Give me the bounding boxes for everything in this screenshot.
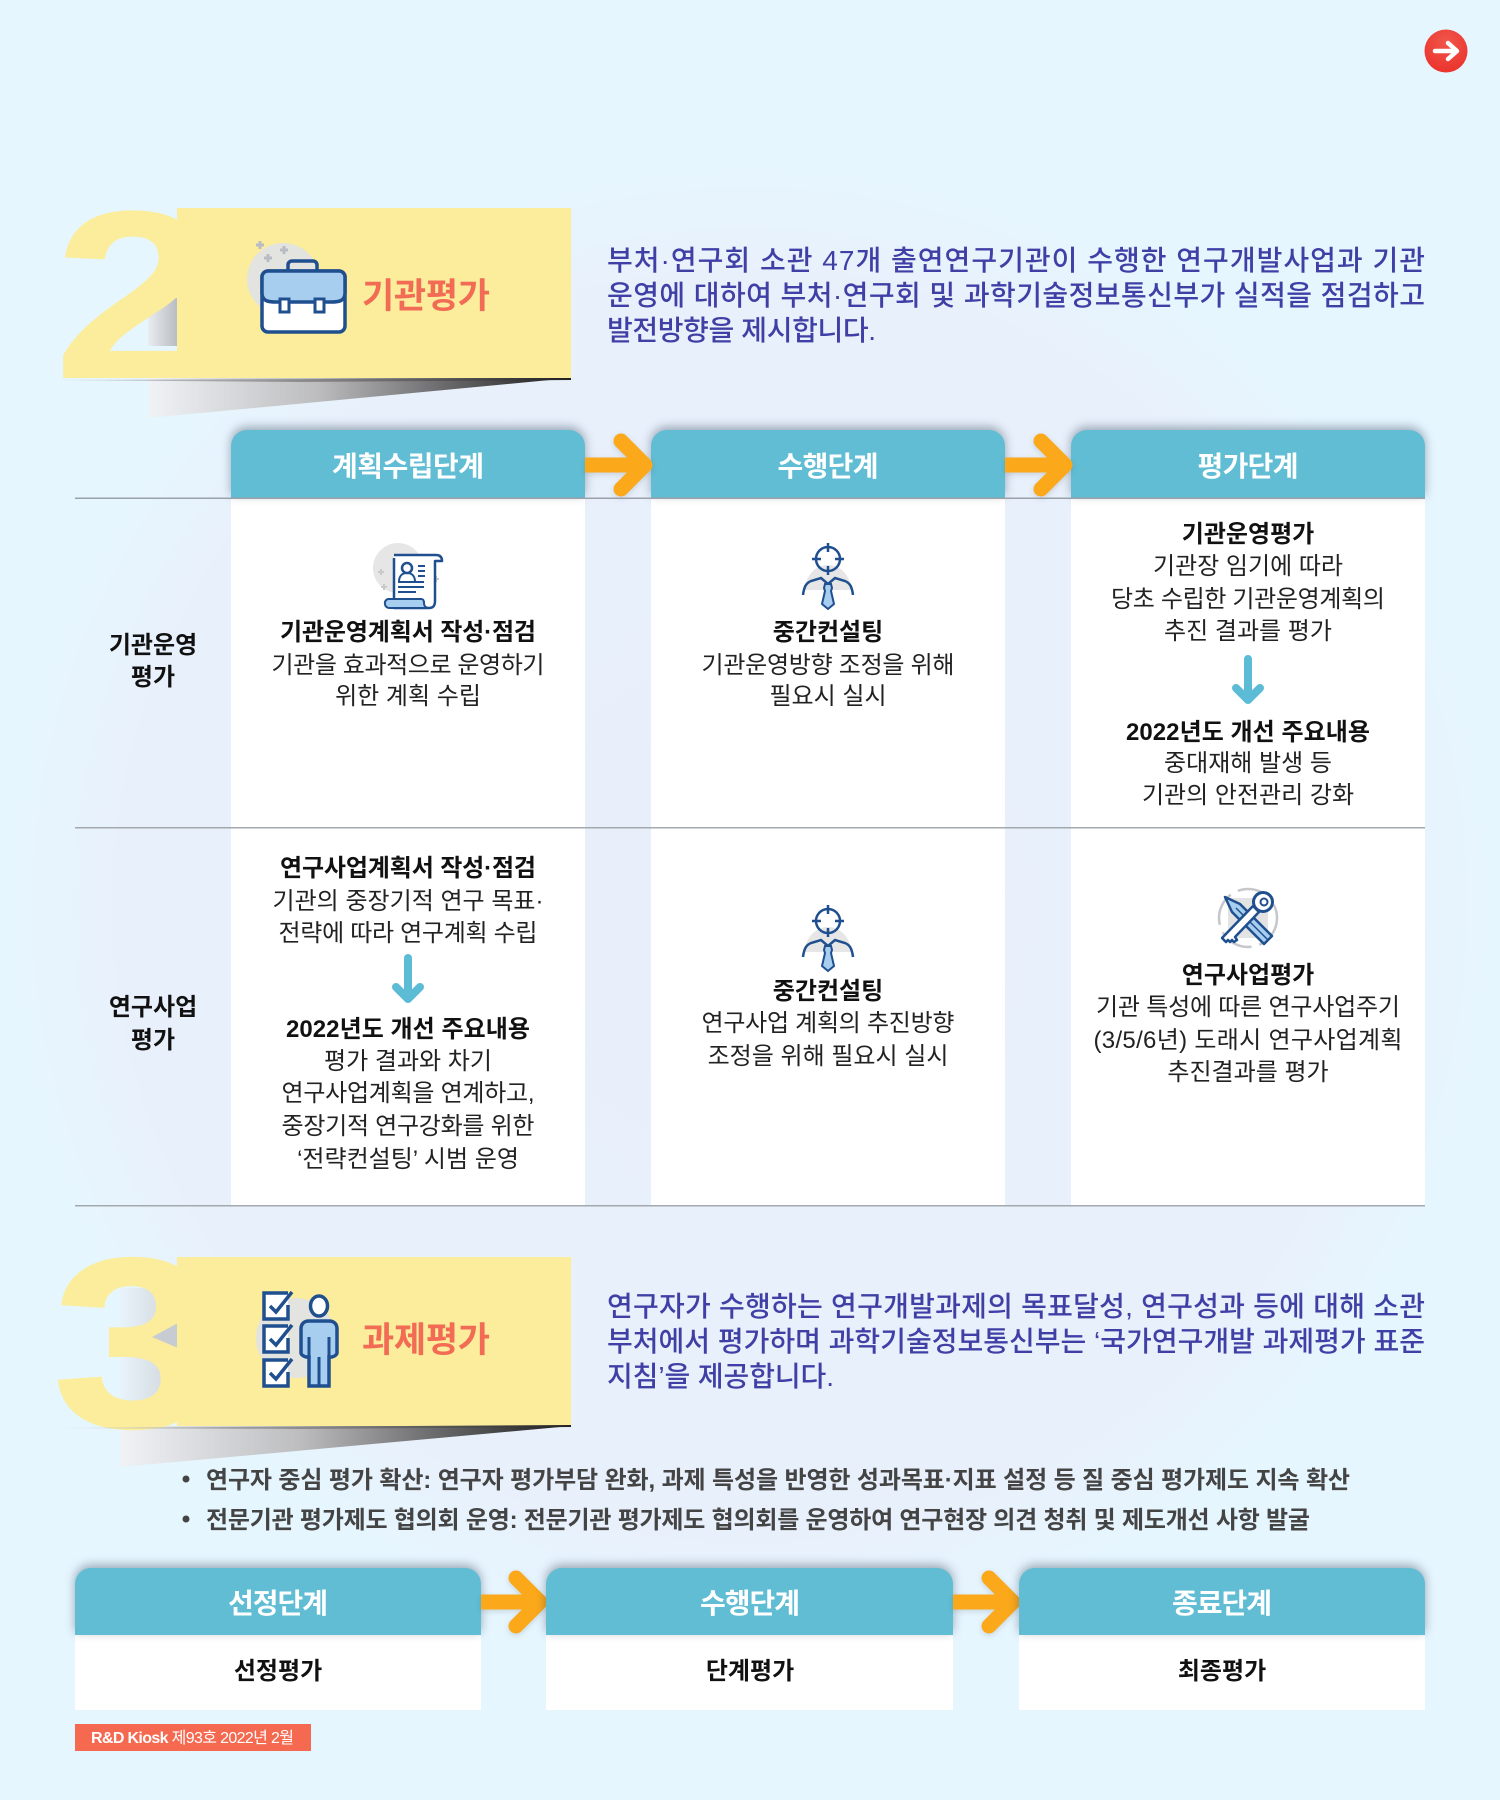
text block: research plan: 전략에 따라 연구계획 수립: [278, 920, 538, 947]
panel: execution stage: [546, 1568, 953, 1710]
intro text: section 3: 부처에서 평가하며 과학기술정보통신부는 ‘국가연구개발 과제평가 표준: [607, 1326, 1425, 1357]
panel: planning stage column: [231, 430, 585, 1205]
text block: 2022 improvements, research: 연구사업계획을 연계하고,: [282, 1080, 534, 1107]
bullet list: 연구자 중심 평가 확산: 연구자 평가부담 완화, 과제 특성을 반영한 성과목표·지표 설정 등 질 중심 평가제도 지속 확산: [206, 1467, 1350, 1494]
arrow: down to research improvements: [396, 958, 420, 999]
table: process by stage: [75, 430, 1425, 1206]
intro text: section 3: [607, 1291, 1425, 1392]
text block: institutional operation evaluation: 기관장 임기에 따라: [1153, 553, 1343, 580]
intro text: section 2: 부처·연구회 소관 47개 출연연구기관이 수행한 연구개발사업과 기관: [607, 245, 1425, 276]
text block: research project evaluation: 연구사업평가: [1182, 962, 1314, 989]
icon: consulting person: [803, 543, 853, 609]
text block: institutional operation evaluation: 기관운영평가: [1182, 521, 1314, 548]
panel: execution stage column: 수행단계: [778, 451, 878, 482]
icon: pencil and key: [1219, 889, 1277, 947]
arrow: execution to evaluation: [1005, 441, 1065, 489]
badge: publication info: R&D Kiosk 제93호 2022년 2월: [91, 1729, 294, 1747]
text block: 2022 improvements, institution: 중대재해 발생 등: [1164, 750, 1332, 777]
panel: selection stage: 선정평가: [234, 1658, 322, 1685]
panel: execution stage: 단계평가: [706, 1658, 794, 1685]
text block: interim consulting: [702, 619, 954, 710]
row label: 기관운영 평가: 기관운영: [109, 632, 197, 659]
text block: institutional operation evaluation: 추진 결과를 평가: [1164, 618, 1332, 645]
text block: 2022 improvements, institution: 기관의 안전관리 강화: [1142, 782, 1354, 809]
text block: institutional operation evaluation: [1111, 521, 1385, 645]
icon: next arrow button: [1424, 30, 1468, 72]
text block: interim consulting, research row: [702, 978, 954, 1070]
arrow: down to improvements: [1236, 659, 1260, 700]
panel: evaluation stage column: 평가단계: [1198, 451, 1298, 482]
intro text: section 3: 연구자가 수행하는 연구개발과제의 목표달성, 연구성과 등에 대해 소관: [607, 1291, 1425, 1322]
arrow: planning to execution: [585, 441, 645, 489]
badge: publication info: [75, 1724, 311, 1751]
arrow: execution to completion: [953, 1578, 1013, 1626]
intro text: section 2: 운영에 대하여 부처·연구회 및 과학기술정보통신부가 실적을 점검하고: [607, 280, 1425, 311]
row label: 연구사업 평가: 연구사업: [109, 994, 197, 1021]
panel: completion stage: 종료단계: [1172, 1588, 1272, 1619]
text block: 2022 improvements, research: ‘전략컨설팅’ 시범 운영: [297, 1146, 519, 1173]
text block: institutional plan: 위한 계획 수립: [335, 683, 481, 710]
text block: interim consulting, research row: 조정을 위해 필요시 실시: [708, 1043, 948, 1070]
text block: research project evaluation: 기관 특성에 따른 연구사업주기: [1096, 994, 1400, 1021]
bullet list: [182, 1467, 1350, 1534]
text block: institutional plan: 기관을 효과적으로 운영하기: [272, 652, 544, 679]
text block: interim consulting: 기관운영방향 조정을 위해: [702, 652, 954, 679]
row label: 연구사업 평가: [109, 994, 197, 1054]
panel: completion stage: 최종평가: [1178, 1658, 1266, 1685]
heading: 과제평가: 과제평가: [362, 1321, 490, 1360]
text block: research project evaluation: 추진결과를 평가: [1167, 1059, 1329, 1086]
text block: 2022 improvements, research: [282, 1016, 534, 1173]
text block: interim consulting, research row: 중간컨설팅: [773, 978, 883, 1005]
banner: section 2 institutional evaluation: [53, 162, 571, 430]
text block: interim consulting: 중간컨설팅: [773, 619, 883, 646]
text block: 2022 improvements, institution: [1126, 719, 1370, 809]
row label: 기관운영 평가: [109, 632, 197, 691]
panel: selection stage: 선정단계: [228, 1588, 328, 1619]
icon: document scroll: [373, 543, 442, 608]
panel: execution stage column: [651, 430, 1005, 1205]
text block: 2022 improvements, research: 중장기적 연구강화를 위한: [282, 1113, 534, 1140]
banner: section 3 project evaluation: [53, 1210, 571, 1478]
panel: evaluation stage column: [1071, 430, 1425, 1205]
row label: 기관운영 평가: 평가: [131, 664, 175, 691]
text block: 2022 improvements, institution: 2022년도 개선 주요내용: [1126, 719, 1370, 746]
text block: institutional operation evaluation: 당초 수립한 기관운영계획의: [1111, 586, 1385, 613]
text block: research plan: [272, 855, 544, 947]
text block: research plan: 기관의 중장기적 연구 목표·: [272, 888, 544, 915]
text block: 2022 improvements, research: 평가 결과와 차기: [324, 1048, 492, 1075]
text block: interim consulting, research row: 연구사업 계획의 추진방향: [702, 1010, 954, 1037]
panel: completion stage: [1019, 1568, 1425, 1710]
text block: institutional plan: 기관운영계획서 작성·점검: [280, 619, 536, 646]
text block: interim consulting: 필요시 실시: [769, 683, 887, 710]
icon: briefcase: [247, 241, 345, 332]
heading: 기관평가: 기관평가: [362, 277, 490, 316]
text block: 2022 improvements, research: 2022년도 개선 주요내용: [286, 1016, 530, 1043]
text block: research project evaluation: [1094, 962, 1402, 1086]
text block: research plan: 연구사업계획서 작성·점검: [280, 855, 536, 882]
row label: 연구사업 평가: 평가: [131, 1027, 175, 1054]
number 3: 3: [53, 1210, 213, 1478]
intro text: section 3: 지침’을 제공합니다.: [607, 1361, 834, 1392]
intro text: section 2: 발전방향을 제시합니다.: [607, 315, 876, 346]
text block: institutional plan: [272, 619, 544, 710]
panel: execution stage: 수행단계: [700, 1588, 800, 1619]
bullet list: 전문기관 평가제도 협의회 운영: 전문기관 평가제도 협의회를 운영하여 연구현장 의견 청취 및 제도개선 사항 발굴: [206, 1507, 1310, 1534]
text block: research project evaluation: (3/5/6년) 도래시 연구사업계획: [1094, 1027, 1402, 1054]
panel: planning stage column: 계획수립단계: [332, 451, 484, 482]
intro text: section 2: [607, 245, 1425, 346]
icon: checklist person: [256, 1292, 337, 1386]
arrow: selection to execution: [481, 1578, 540, 1626]
number 2: 2: [53, 162, 213, 430]
icon: consulting person, research row: [803, 905, 853, 971]
panel: selection stage: [75, 1568, 481, 1710]
